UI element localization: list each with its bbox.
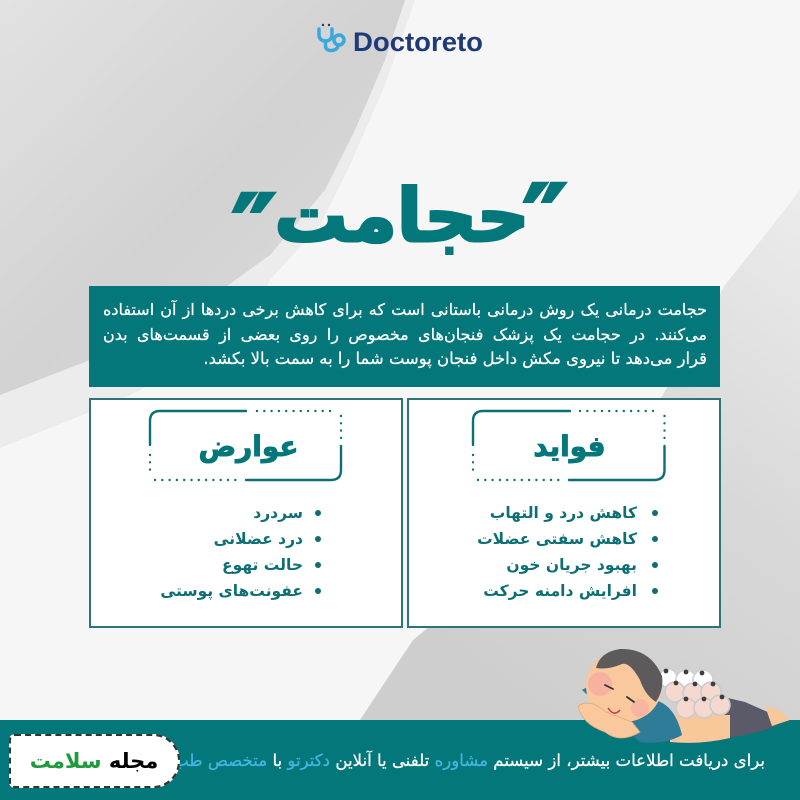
list: side effects: درد عضلانی — [214, 530, 303, 548]
pants — [715, 695, 776, 738]
title: حجامت — [274, 174, 530, 259]
hair — [596, 649, 662, 702]
list: side effects: حالت تهوع — [222, 556, 303, 574]
list: side effects: سردرد — [253, 504, 303, 522]
panel: side effects — [89, 398, 403, 628]
list: benefits: کاهش سفتی عضلات — [477, 530, 637, 548]
list: side effects: عفونت‌های پوستی — [160, 582, 303, 600]
foot — [765, 706, 790, 726]
heading: benefits: فواید — [533, 430, 606, 463]
list: benefits: کاهش درد و التهاب — [490, 504, 637, 522]
list: side effects — [160, 504, 321, 600]
face — [586, 650, 662, 722]
panel: intro — [89, 286, 720, 387]
illustration: man with cupping — [578, 649, 790, 743]
title opening quote: ″ — [523, 163, 567, 280]
badge — [9, 734, 180, 788]
hands — [578, 703, 640, 738]
icon: stethoscope — [319, 24, 344, 50]
intro line 3: قرار می‌دهد تا نیروی مکش داخل فنجان پوست شما را به سمت بالا بکشد. — [203, 349, 707, 368]
title closing quote: ″ — [232, 173, 276, 290]
intro line 2: می‌کنند. در حجامت یک پزشک فنجان‌های مخصوص را روی بعضی از قسمت‌های بدن — [103, 325, 707, 344]
panel: benefits — [407, 398, 721, 628]
list: benefits: افرایش دامنه حرکت — [483, 582, 637, 600]
logo: Doctoreto — [317, 24, 483, 57]
wordmark: Doctoreto — [353, 27, 483, 57]
shirt — [582, 687, 682, 743]
list: benefits — [477, 504, 658, 600]
eyes and mouth — [605, 685, 634, 702]
cups — [659, 669, 713, 690]
footer text: برای دریافت اطلاعات بیشتر، از سیستم مشاوره تلفنی یا آنلاین دکترتو با متخصص طب — [173, 751, 765, 770]
intro line 1: حجامت درمانی یک روش درمانی باستانی است که برای کاهش برخی دردها از آن استفاده — [103, 300, 707, 319]
lower back — [670, 715, 730, 743]
footer band — [0, 720, 800, 800]
heading: side effects: عوارض — [198, 430, 299, 463]
list: benefits: بهبود جریان خون — [506, 556, 637, 574]
badge text: مجله سلامت — [30, 749, 158, 773]
